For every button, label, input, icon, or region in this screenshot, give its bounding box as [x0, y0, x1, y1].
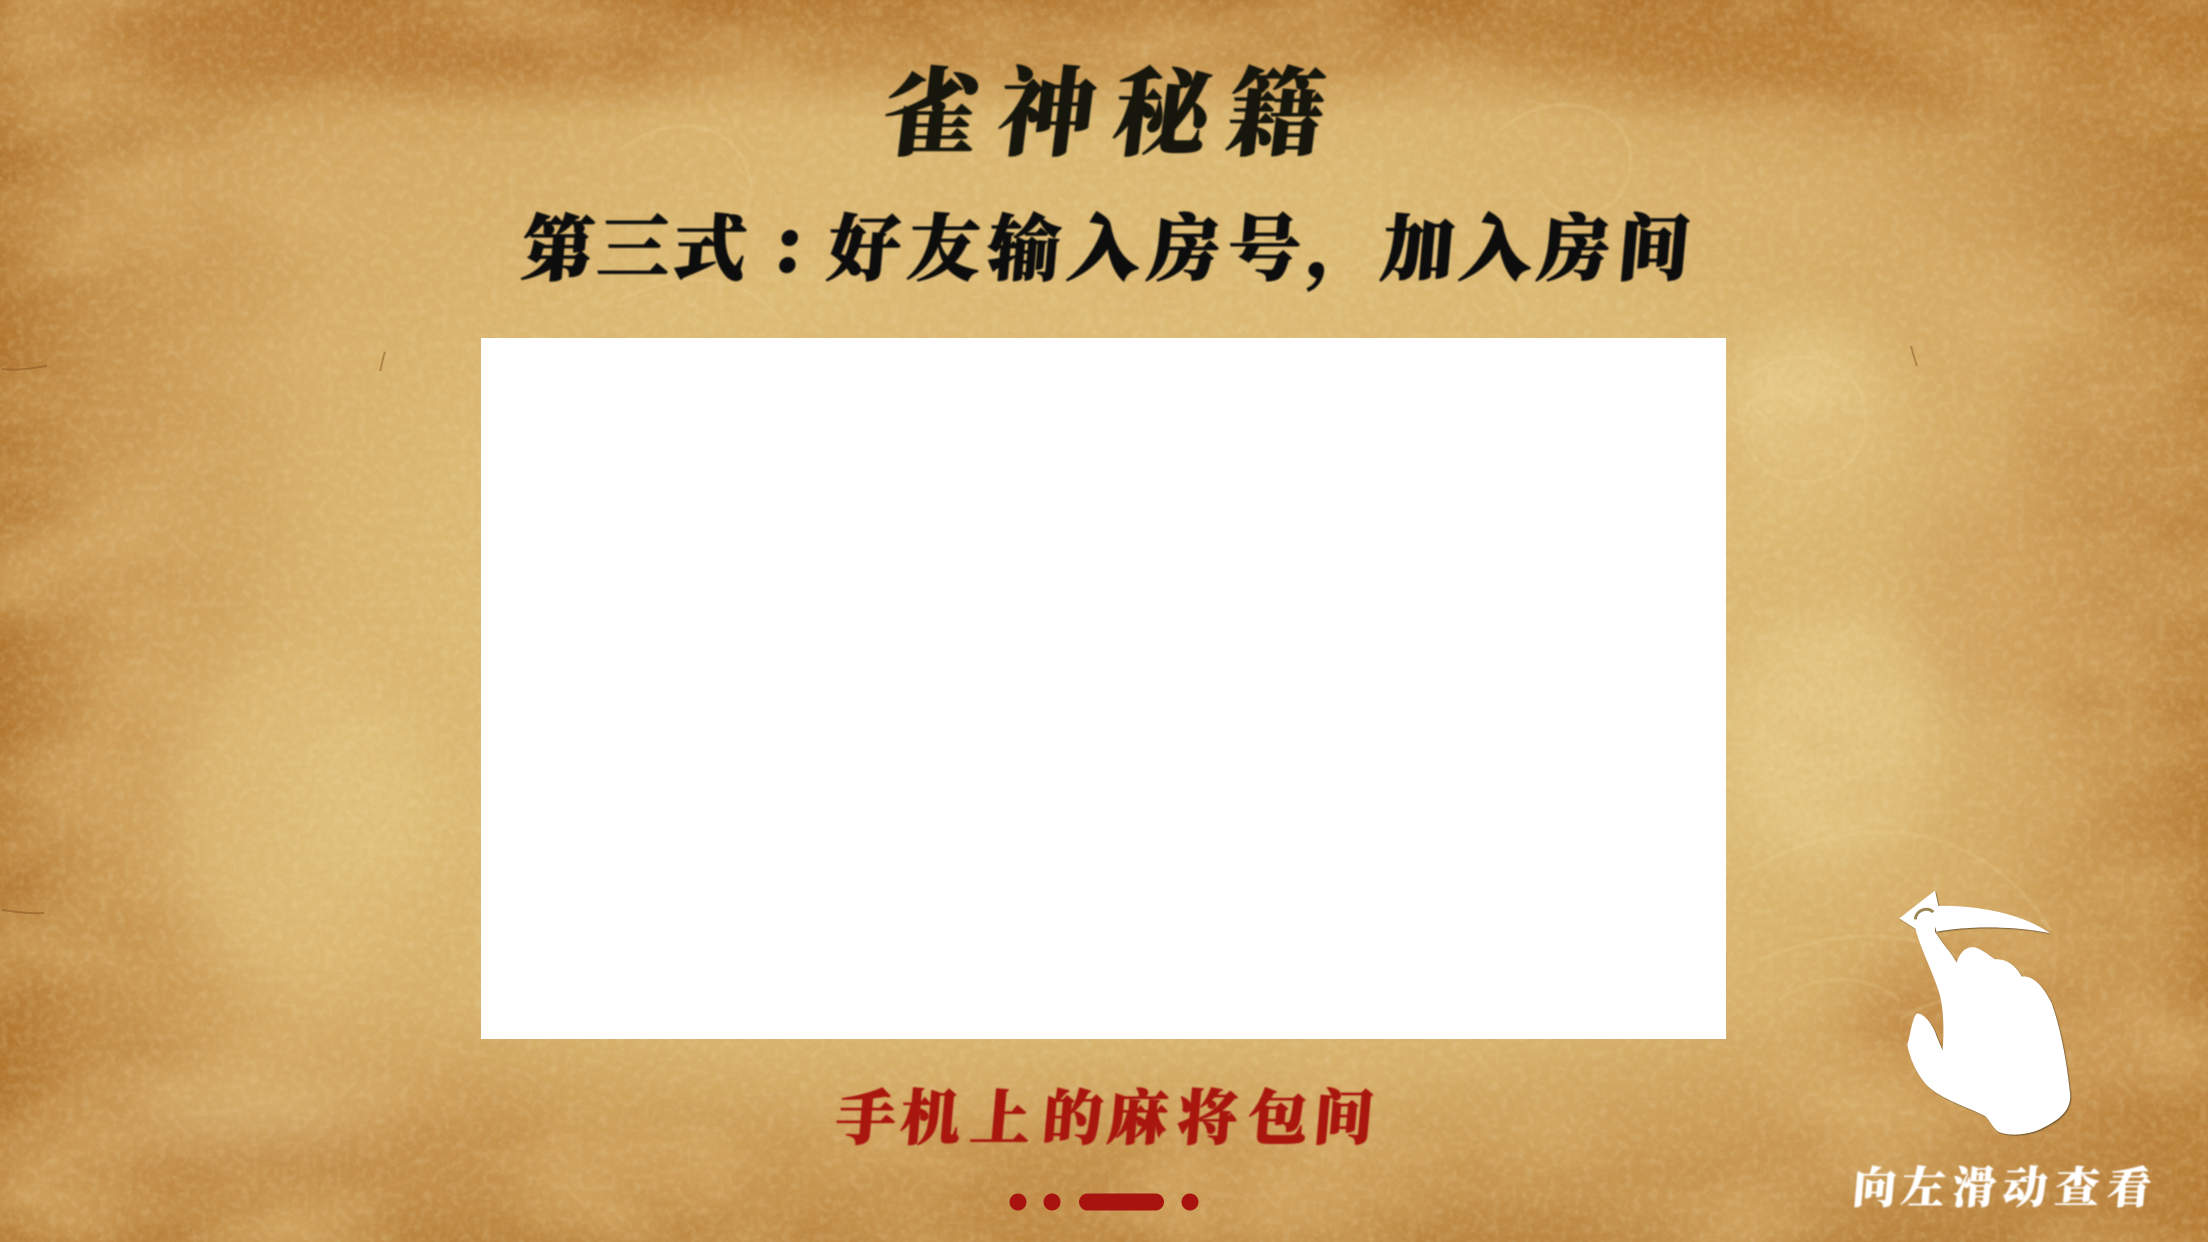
- pagination dots: [1010, 1194, 1198, 1210]
- icon: swipe-left hand: [1899, 891, 2070, 1135]
- subheading: step three: 第三式：好友输入房号，加入房间: [518, 210, 1694, 292]
- white content panel: [481, 338, 1726, 1039]
- title: 雀神秘籍: 雀神秘籍: [877, 61, 1331, 168]
- caption: red subtitle: 手机上的麻将包间: [833, 1086, 1377, 1153]
- swipe hint text: 向左滑动查看: [1850, 1164, 2153, 1213]
